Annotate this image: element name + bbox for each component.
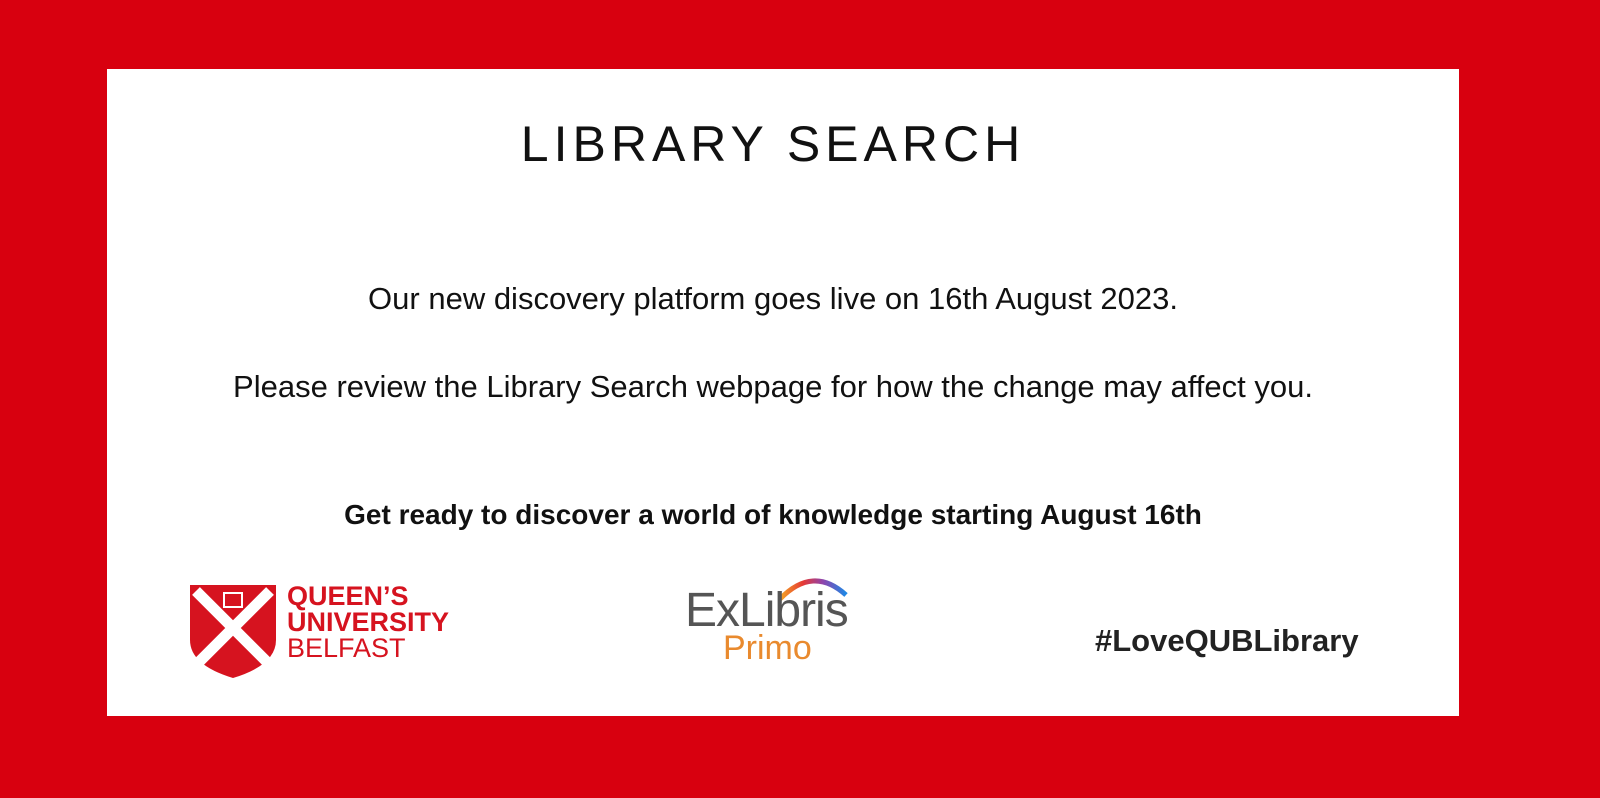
text: QUB wordmark: QUEEN’S — [287, 581, 409, 611]
text: Primo: Primo — [723, 629, 812, 667]
text: QUB wordmark: UNIVERSITY — [287, 607, 449, 637]
logo: Queen's University Belfast — [190, 581, 449, 678]
icon: shield — [190, 585, 276, 678]
text: review webpage: Please review the Library Search webpage for how the change may affect you. — [233, 369, 1313, 404]
logo: ExLibris Primo — [685, 578, 848, 667]
text: QUB wordmark: BELFAST — [287, 633, 406, 663]
title: LIBRARY SEARCH — [521, 116, 1025, 172]
text: QUB wordmark — [287, 581, 449, 663]
text: ExLibris: ExLibris — [685, 584, 848, 637]
text: bold tagline: Get ready to discover a world of knowledge starting August 16th — [344, 499, 1202, 530]
text: go-live date: Our new discovery platform goes live on 16th August 2023. — [368, 281, 1178, 316]
hashtag: #LoveQUBLibrary — [1095, 623, 1359, 658]
panel: white card — [107, 69, 1459, 716]
icon: rainbow arc — [782, 578, 848, 601]
